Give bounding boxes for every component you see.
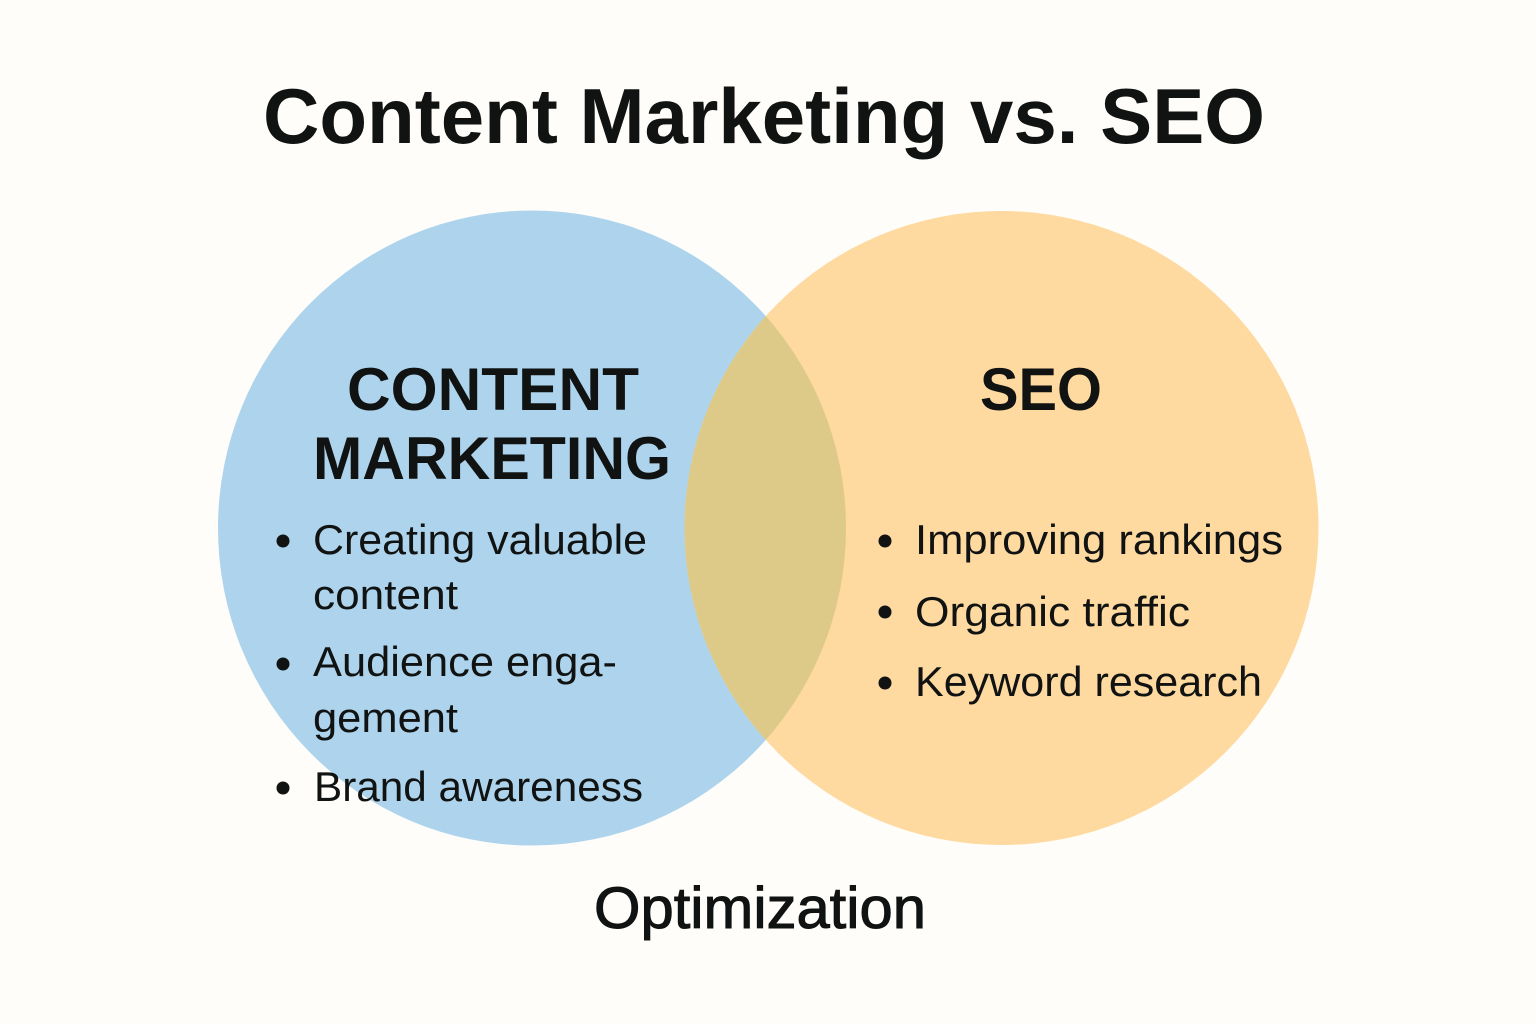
venn infographic bbox=[218, 86, 1318, 940]
heading: content marketing: MARKETING bbox=[313, 425, 671, 492]
heading: content marketing: CONTENT bbox=[347, 356, 639, 423]
list: content marketing: gement bbox=[313, 694, 458, 741]
heading: SEO: SEO bbox=[980, 356, 1102, 423]
heading: content marketing bbox=[313, 356, 671, 492]
circle: content marketing bbox=[218, 210, 846, 846]
list: content marketing: Audience enga- bbox=[313, 638, 617, 685]
list: content marketing: Brand awareness bbox=[314, 763, 643, 810]
list: content marketing: content bbox=[313, 571, 458, 618]
overlap region bbox=[684, 316, 846, 740]
list: SEO: Improving rankings bbox=[915, 516, 1283, 563]
overlap label: Optimization bbox=[594, 876, 926, 941]
title: Content Marketing vs. SEO bbox=[263, 72, 1265, 160]
list: SEO bbox=[878, 516, 1283, 705]
list: content marketing bbox=[276, 516, 647, 810]
list: content marketing: Creating valuable bbox=[313, 516, 647, 563]
circle: SEO bbox=[684, 211, 1318, 845]
list: SEO: Keyword research bbox=[915, 658, 1262, 705]
list: SEO: Organic traffic bbox=[915, 588, 1190, 635]
